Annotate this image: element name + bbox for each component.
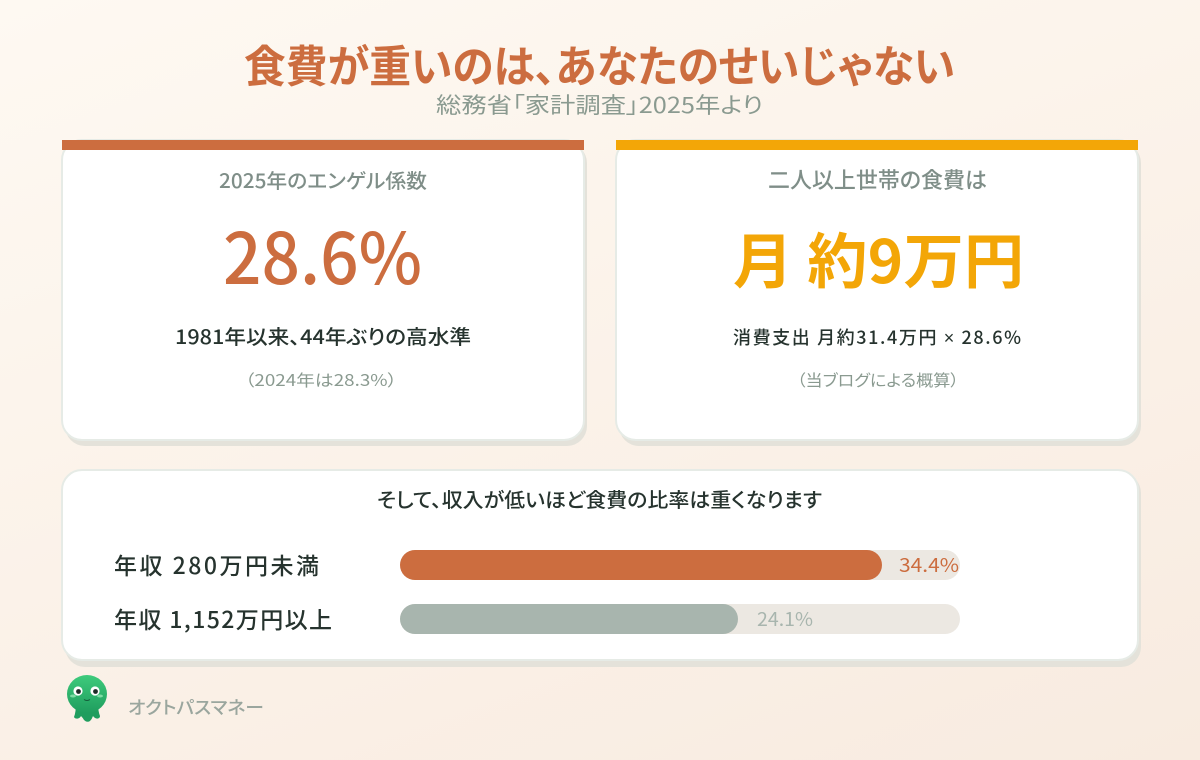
- bar row: high income: 年収 1,152万円以上: [114, 601, 332, 635]
- big number: 月 約9万円: [733, 214, 1024, 301]
- panel: Engel coefficient: [62, 140, 587, 446]
- panel heading: 2025年のエンゲル係数: [219, 165, 427, 194]
- panel: income comparison: [62, 470, 1141, 667]
- note: （2024年は28.3%）: [245, 367, 397, 391]
- panel: monthly food cost: [616, 140, 1141, 446]
- bar row: low income: [114, 547, 960, 581]
- bar row: low income: 34.4%: [899, 551, 959, 578]
- panel heading: 二人以上世帯の食費は: [768, 163, 987, 195]
- note: （当ブログによる概算）: [797, 367, 959, 391]
- panel heading: そして、収入が低いほど食費の比率は重くなります: [377, 484, 822, 513]
- description: 1981年以来、44年ぶりの高水準: [175, 321, 471, 350]
- bar row: high income: [114, 601, 960, 635]
- bar row: high income: 24.1%: [757, 605, 813, 632]
- icon: green octopus mascot: [67, 675, 107, 722]
- big number: 28.6%: [223, 203, 422, 305]
- subtitle: 総務省「家計調査」2025年より: [436, 88, 763, 120]
- bar row: low income: 年収 280万円未満: [114, 547, 319, 581]
- title: 食費が重いのは、あなたのせいじゃない: [244, 31, 955, 95]
- description: 消費支出 月約31.4万円 × 28.6%: [733, 324, 1021, 350]
- brand name: オクトパスマネー: [128, 694, 264, 720]
